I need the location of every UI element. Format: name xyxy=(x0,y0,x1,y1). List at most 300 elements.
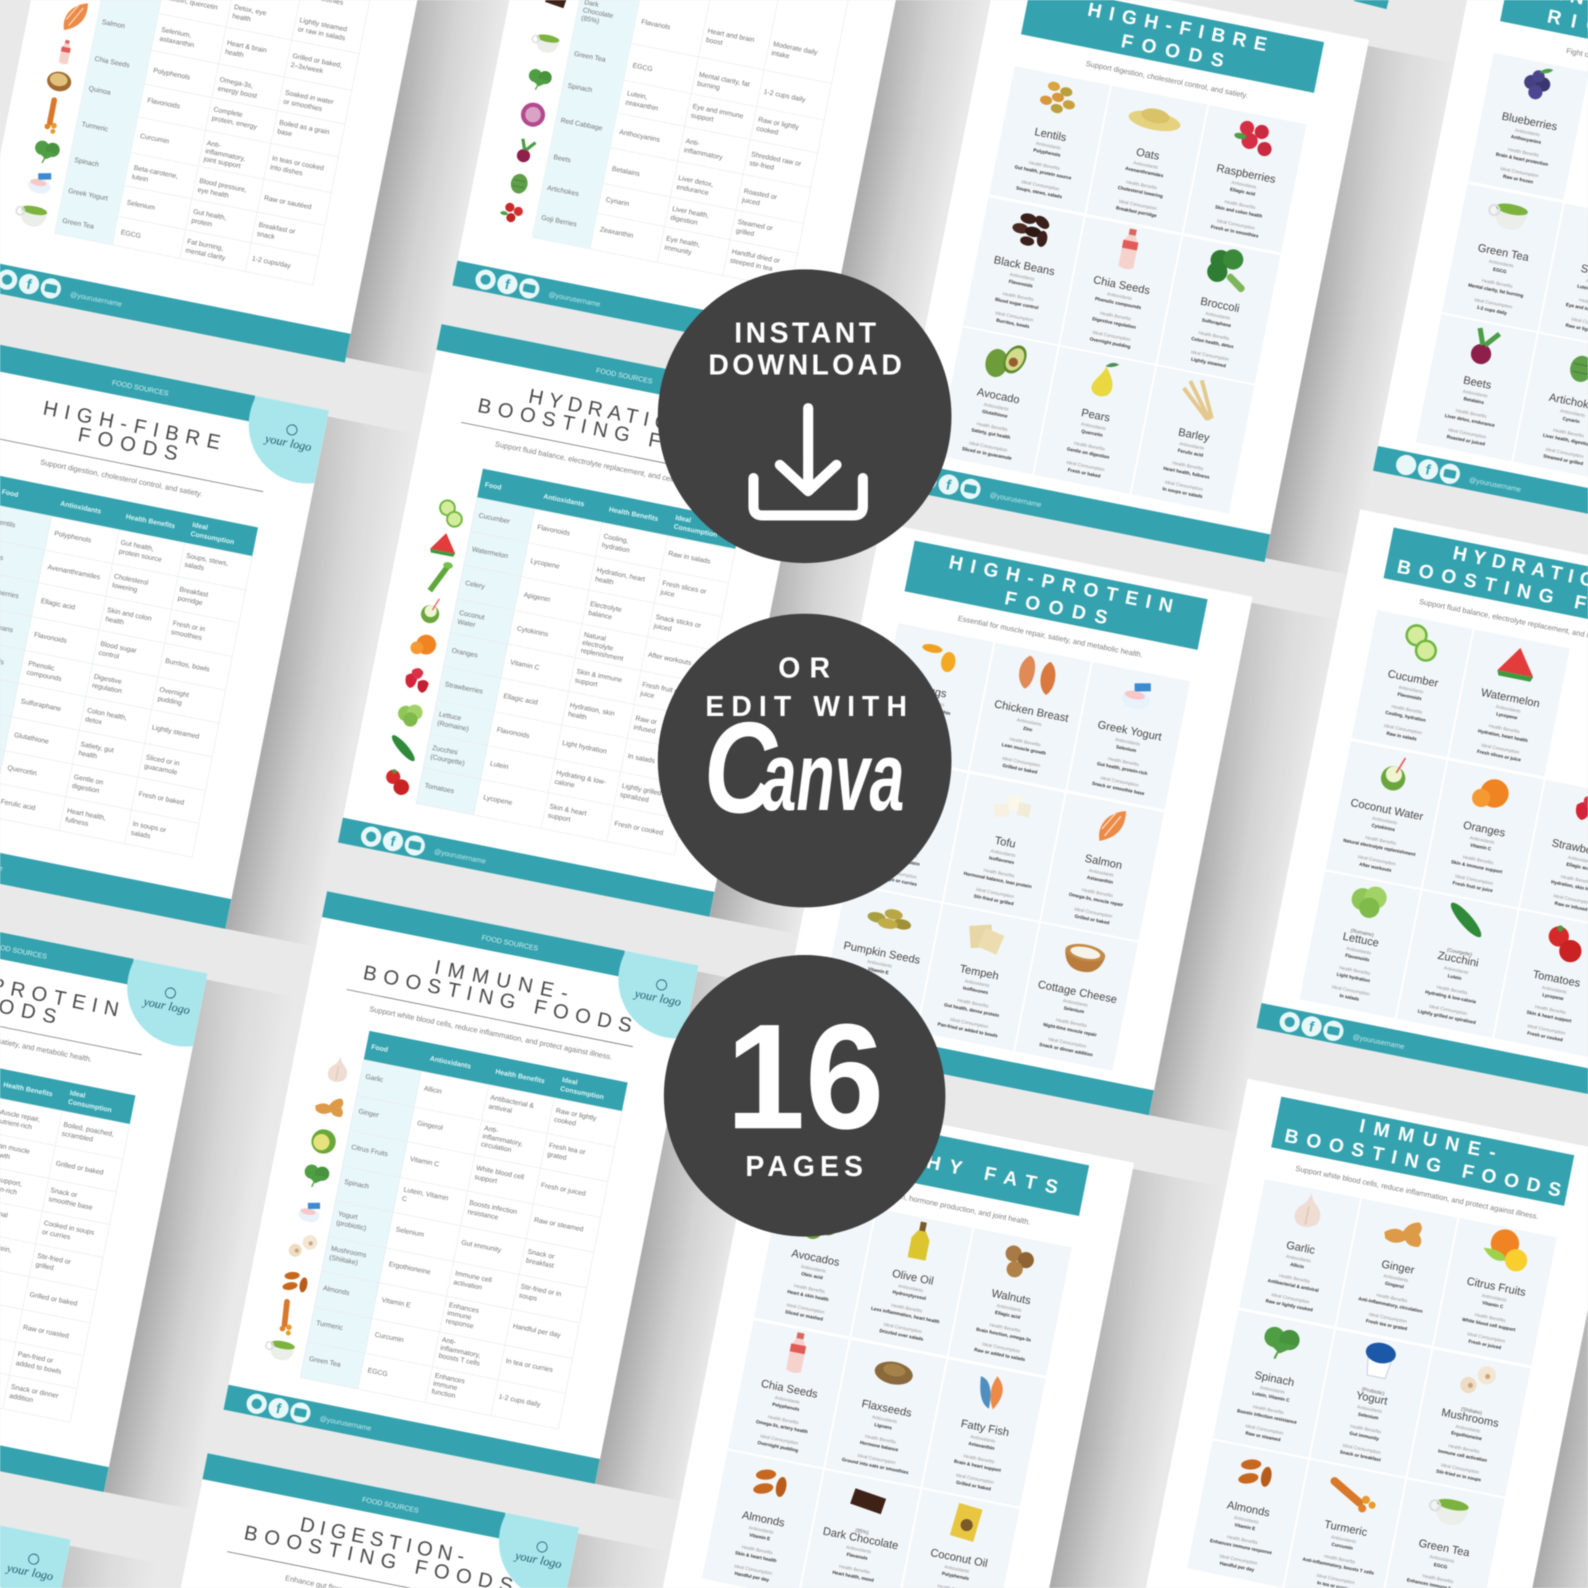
row: celery: balance xyxy=(588,610,613,621)
row: zucchini xyxy=(385,731,671,815)
card: chia seeds xyxy=(728,1320,849,1467)
row: cucumber: Flavonoids xyxy=(537,524,571,538)
badge: instant download: INSTANT xyxy=(734,317,877,349)
row: quinoa: Boiled as a grain xyxy=(278,119,330,136)
badge: or edit with canva: EDIT WITH xyxy=(705,691,907,723)
row: spinach: cooked xyxy=(756,125,779,137)
top band xyxy=(0,899,134,985)
card: green tea: Antioxidants xyxy=(1488,259,1515,269)
card: pears: Antioxidants xyxy=(1081,421,1107,431)
card: green tea: Antioxidants xyxy=(1429,1554,1455,1564)
top band xyxy=(322,891,625,977)
card: tomatoes: Tomatoes xyxy=(1532,969,1582,990)
row: quinoa: protein, energy xyxy=(211,115,258,131)
subtitle: Support digestion, cholesterol control, and satiety. xyxy=(1085,59,1249,100)
title band xyxy=(1271,1097,1574,1206)
row: turmeric: Curcumin xyxy=(139,133,170,146)
card: flaxseeds: Ideal Consumption xyxy=(857,1453,896,1465)
row: coconut water: Natural xyxy=(583,632,606,643)
card: pears: Quercetin xyxy=(1081,429,1103,438)
row: black beans xyxy=(0,616,211,679)
row: turmeric xyxy=(266,1299,556,1391)
row: red cabbage: Anti- xyxy=(685,138,700,148)
title: HIGH-PROTEIN xyxy=(947,552,1175,618)
row: green tea: Green Tea xyxy=(308,1356,341,1369)
card: ginger: Ginger xyxy=(1380,1259,1416,1277)
row: turmeric: In tea or curries xyxy=(505,1358,554,1374)
page: table immune-boosting foods xyxy=(223,890,699,1484)
row: citrus fruits xyxy=(309,1127,588,1206)
row: chia seeds: compounds xyxy=(26,669,63,683)
row: watermelon: Fresh slices or xyxy=(662,580,707,596)
card: ginger: Fresh tea or grated xyxy=(1365,1318,1408,1331)
card: salmon: Grilled or baked xyxy=(1074,914,1110,925)
row: ginger: Anti- xyxy=(483,1125,499,1135)
row: mushrooms: (Shiitake) xyxy=(329,1254,358,1267)
card: green tea: Health Benefits xyxy=(1422,1573,1455,1584)
card: tomatoes: Antioxidants xyxy=(1541,985,1568,995)
rows: eggs to cheese: Stir-fried or xyxy=(37,1253,71,1266)
row: zucchini: calorie xyxy=(554,779,575,789)
logo: your logo xyxy=(512,1548,563,1571)
card: strawberries xyxy=(1520,780,1588,927)
row: mushrooms: activation xyxy=(453,1279,483,1292)
row: almonds: immune xyxy=(447,1310,472,1322)
card: watermelon xyxy=(1449,629,1570,777)
row: garlic: Antibacterial & xyxy=(490,1094,534,1110)
card: ginger: Ideal Consumption xyxy=(1368,1312,1408,1324)
card: barley xyxy=(1132,366,1254,514)
row: lettuce: Lettuce xyxy=(438,711,462,722)
card: coconut water: Coconut Water xyxy=(1349,797,1424,823)
row: green tea xyxy=(529,32,809,109)
card: blueberries xyxy=(1468,53,1588,200)
row: coconut water: After workouts xyxy=(647,652,692,667)
row: kale: Detox, eye xyxy=(233,4,267,17)
card: almonds: Health Benefits xyxy=(1226,1534,1259,1545)
card: flaxseeds: Flaxseeds xyxy=(861,1398,913,1420)
card: avocados: Oleic acid xyxy=(801,1271,823,1280)
rows: eggs to cheese: grilled xyxy=(35,1262,54,1272)
card: yogurt: Ideal Consumption xyxy=(1342,1443,1382,1455)
card: tofu: Health Benefits xyxy=(983,868,1016,879)
card: beets xyxy=(1416,314,1537,461)
row: strawberries xyxy=(403,666,659,739)
card: barley: Ferulic acid xyxy=(1177,448,1204,458)
card: almonds: Almonds xyxy=(1226,1499,1271,1520)
page: table high-fibre foods xyxy=(0,344,330,930)
row: spinach: Beta-carotene, xyxy=(133,165,179,180)
row: dark chocolate xyxy=(543,0,819,69)
band label: FOOD SOURCES xyxy=(111,379,169,398)
row: chia seeds: Polyphenols xyxy=(153,67,191,82)
row: spinach: Eye and immune xyxy=(692,103,744,120)
card: strawberries: Raw or infused xyxy=(1554,901,1588,912)
card: pears: Fresh or baked xyxy=(1067,467,1101,479)
card: pumpkin seeds: Recovery, magnesium xyxy=(850,983,899,998)
title band xyxy=(905,541,1208,650)
row: spinach xyxy=(526,68,800,142)
card: yogurt xyxy=(1310,1330,1431,1477)
row: barley: Heart health, xyxy=(66,808,106,822)
row: green tea: EGCG xyxy=(367,1367,388,1378)
row: yogurt: (probiotic) xyxy=(336,1220,367,1232)
footer xyxy=(778,1016,1154,1115)
row: quinoa: Quinoa xyxy=(88,85,111,97)
table header: Ideal xyxy=(69,1090,86,1100)
row: goji berries xyxy=(499,201,781,276)
rows: eggs to cheese: Cooked in soups xyxy=(43,1220,95,1237)
card: chia seeds xyxy=(1060,217,1181,364)
row: tomatoes: Lycopene xyxy=(483,794,513,807)
row: chia seeds: pudding xyxy=(157,696,182,707)
table header: Ideal xyxy=(561,1077,578,1087)
row: barley xyxy=(0,783,167,843)
card: mushrooms: Health Benefits xyxy=(1448,1443,1481,1454)
row: spinach: Blood pressure, xyxy=(199,178,247,194)
card: tomatoes: Lycopene xyxy=(1542,992,1564,1001)
card: oats: Ideal Consumption xyxy=(1118,199,1158,211)
rows: eggs to cheese: Boiled, poached, xyxy=(63,1122,114,1139)
row: greek yogurt: protein xyxy=(191,218,213,229)
footer xyxy=(1373,446,1588,545)
row: watermelon: juice xyxy=(659,589,675,599)
card: barley: Antioxidants xyxy=(1179,441,1205,451)
row: watermelon: health xyxy=(594,576,614,587)
row: salmon: Grilled or baked, xyxy=(292,53,343,70)
card: lentils: Ideal Consumption xyxy=(1021,179,1060,192)
row: yogurt: breakfast xyxy=(525,1258,554,1270)
card: lentils: Iron, plant protein xyxy=(880,854,920,867)
card: flaxseeds xyxy=(825,1340,946,1487)
row: chia seeds xyxy=(0,649,189,708)
title band xyxy=(1384,527,1588,637)
footer: f xyxy=(25,277,33,293)
row: spinach: zeaxanthin xyxy=(625,99,659,113)
logo xyxy=(126,958,208,1048)
card: mushrooms xyxy=(1408,1349,1531,1497)
rows: eggs to cheese: added to bowls xyxy=(15,1360,62,1376)
card: raspberries: Ideal Consumption xyxy=(1217,218,1256,231)
row: barley: salads xyxy=(130,830,152,841)
row: chia seeds: Phenolic xyxy=(28,660,55,672)
row: chia seeds: Digestive xyxy=(93,674,122,686)
row: barley: fullness xyxy=(65,817,89,828)
card: cucumber: Cucumber xyxy=(1387,668,1440,690)
card: olive oil xyxy=(851,1209,972,1356)
card: citrus fruits: Citrus Fruits xyxy=(1466,1276,1527,1299)
row: ginger: circulation xyxy=(480,1141,512,1154)
card: turmeric xyxy=(1284,1460,1405,1588)
row: mushrooms xyxy=(288,1232,563,1309)
card: oranges: Oranges xyxy=(1462,820,1507,840)
card: green tea: EGCG xyxy=(1493,267,1507,274)
card: dark chocolate xyxy=(799,1470,920,1588)
card: dark chocolate: Heart health, mood xyxy=(832,1570,874,1583)
row: oranges: Fresh fruit or xyxy=(641,681,681,696)
table header: Ideal xyxy=(675,515,692,525)
card: chicken breast: Antioxidants xyxy=(1016,717,1043,727)
row: green tea: Green Tea xyxy=(62,218,94,231)
card: tofu xyxy=(944,774,1065,921)
row: lentils: Soups, stews, xyxy=(186,553,229,568)
card: almonds: Health Benefits xyxy=(741,1544,774,1555)
footer xyxy=(0,260,351,363)
row: tomatoes: Fresh or cooked xyxy=(614,820,664,837)
row: green tea: immune xyxy=(432,1380,458,1392)
logotype: Canva: anva xyxy=(762,722,904,831)
card: barley: Health Benefits xyxy=(1172,460,1204,471)
card: almonds: Handful per day xyxy=(734,1571,770,1583)
row: coconut water xyxy=(419,596,694,676)
row: green tea: Enhances xyxy=(434,1373,465,1385)
footer: @yourusername xyxy=(1352,1033,1405,1051)
badge: 16 pages: 16 xyxy=(726,992,884,1160)
row: green tea: Green Tea xyxy=(573,51,606,64)
row: yogurt: Snack or xyxy=(527,1249,555,1261)
row: oranges: juice xyxy=(639,690,655,700)
row: turmeric: inflammatory, xyxy=(440,1345,481,1360)
rows: eggs to cheese: smoothie base xyxy=(48,1196,93,1212)
row: garlic: Garlic xyxy=(365,1074,384,1084)
card: raspberries: Raspberries xyxy=(1215,163,1277,186)
card: beets: Roasted or juiced xyxy=(1446,434,1486,447)
card: pumpkin seeds xyxy=(820,884,941,1031)
row: artichokes xyxy=(509,172,774,244)
card: watermelon: Lycopene xyxy=(1496,711,1518,721)
card: walnuts: Antioxidants xyxy=(996,1303,1023,1313)
card: olive oil: Antioxidants xyxy=(898,1283,924,1293)
badge: instant download: DOWNLOAD xyxy=(708,350,902,382)
row: tomatoes: Tomatoes xyxy=(424,783,455,795)
badge: or edit with canva: OR xyxy=(778,653,830,685)
card: coconut water: Ideal Consumption xyxy=(1357,854,1397,867)
table grid xyxy=(416,497,735,855)
card: watermelon: Health Benefits xyxy=(1488,723,1521,734)
card: walnuts: Brain function, omega-3s xyxy=(976,1327,1032,1343)
card: spinach: Boosts infection resistance xyxy=(1237,1408,1298,1425)
row: strawberries: health xyxy=(567,711,587,722)
row: turmeric: into dishes xyxy=(270,164,304,178)
row: red cabbage: Shredded raw or xyxy=(751,151,802,168)
row: salmon: Salmon xyxy=(101,19,126,30)
row: red cabbage xyxy=(519,100,803,180)
row: citrus fruits: White blood cell xyxy=(476,1165,525,1181)
card: chicken breast xyxy=(970,643,1091,790)
card: walnuts: Health Benefits xyxy=(989,1322,1022,1333)
band of cropped page at top right xyxy=(1352,0,1390,9)
card: tofu: Ideal Consumption xyxy=(976,887,1015,899)
row: tomatoes xyxy=(383,768,665,847)
footer: @yourusername xyxy=(1469,476,1522,494)
row: garlic: Raw or lightly xyxy=(555,1108,597,1122)
card: avocado: Avocado xyxy=(976,386,1021,407)
card: barley: In soups or salads xyxy=(1162,486,1203,499)
card: mushrooms: Immune cell activation xyxy=(1438,1448,1488,1463)
logo: your logo xyxy=(262,431,313,454)
logotype: Canva xyxy=(704,696,904,840)
card: eggs: Antioxidants xyxy=(919,698,945,708)
card: avocado: Antioxidants xyxy=(983,402,1010,412)
card: coconut oil: Coconut Oil xyxy=(929,1547,989,1570)
card: avocado: Health Benefits xyxy=(976,421,1009,432)
badge: 16 pages: PAGES xyxy=(745,1151,863,1183)
row: goji berries: Goji Berries xyxy=(541,215,578,229)
card: turmeric: Antioxidants xyxy=(1331,1534,1357,1544)
row: oranges: Oranges xyxy=(451,647,479,660)
row: artichokes: Cynarin xyxy=(605,197,630,208)
card: eggs xyxy=(873,623,994,770)
row: green tea xyxy=(14,203,293,278)
row: barley: In soups or xyxy=(132,821,167,834)
card: chicken breast: Grilled or baked xyxy=(1002,763,1038,775)
row: zucchini: Zucchini xyxy=(432,745,458,757)
card: turmeric: Turmeric xyxy=(1323,1519,1369,1539)
row: green tea: 1-2 cups daily xyxy=(498,1394,542,1409)
page: table hydration-boosting foods xyxy=(338,324,813,917)
row: red cabbage: stir-fried xyxy=(749,160,775,172)
row: oats: Breakfast xyxy=(179,586,209,599)
card: almonds: Vitamin E xyxy=(749,1532,771,1541)
card: raspberries: Fresh or in smoothies xyxy=(1210,224,1259,239)
card: lettuce: Antioxidants xyxy=(1346,946,1372,956)
row: green tea: EGCG xyxy=(632,62,653,73)
row: pears xyxy=(0,749,186,812)
row: coconut water: Water xyxy=(457,619,477,629)
row: raspberries xyxy=(0,582,206,642)
card: mushrooms: Stir-fried or in soups xyxy=(1436,1469,1482,1483)
card: garlic: Health Benefits xyxy=(1279,1273,1311,1284)
page: table top centre xyxy=(452,0,927,360)
row: greek yogurt: Gut health, xyxy=(192,209,227,222)
footer: f xyxy=(1424,462,1432,479)
card: turmeric: Anti-inflammatory, boosts T cells xyxy=(1302,1557,1375,1576)
card: chia seeds: Ideal Consumption xyxy=(1092,330,1131,342)
row: mushrooms: soups xyxy=(518,1292,538,1303)
card: eggs: Eggs xyxy=(920,684,948,701)
card: oranges xyxy=(1423,760,1544,908)
footer: @yourusername xyxy=(548,290,601,309)
row: ginger: Gingerol xyxy=(416,1120,444,1132)
table header xyxy=(0,1044,135,1124)
row: spinach: resistance xyxy=(467,1209,499,1222)
card: blueberries: Anthocyanins xyxy=(1510,134,1542,145)
rows: eggs to cheese: Snack or xyxy=(50,1187,78,1199)
row: oranges: Vitamin C xyxy=(510,659,540,672)
card: olive oil: Health Benefits xyxy=(891,1303,923,1314)
card: tempeh: Isoflavones xyxy=(963,985,989,995)
row: spinach: Spinach xyxy=(567,83,593,94)
card: pumpkin seeds: Health Benefits xyxy=(860,978,892,989)
card: almonds: Skin & heart health xyxy=(735,1550,777,1563)
table grid xyxy=(0,505,252,857)
footer xyxy=(224,1385,600,1484)
row: strawberries: infused xyxy=(633,724,656,735)
row: spinach: lutein xyxy=(131,174,149,184)
card: tempeh: Ideal Consumption xyxy=(950,1017,989,1029)
row: green tea: function xyxy=(431,1388,456,1400)
footer xyxy=(0,825,231,929)
card: coconut water: After workouts xyxy=(1359,862,1392,873)
footer xyxy=(452,261,829,360)
card: artichokes: Steamed or grilled xyxy=(1543,453,1584,466)
title band xyxy=(786,1107,1089,1216)
row: quinoa: base xyxy=(277,128,293,138)
card: coconut water: Cytokinins xyxy=(1371,823,1396,832)
row: green tea: Fat burning, xyxy=(187,238,224,252)
row: chia seeds: or smoothies xyxy=(283,99,323,113)
logo: your logo xyxy=(632,986,682,1009)
row: artichokes: Artichokes xyxy=(547,185,580,198)
card: cottage cheese: Ideal Consumption xyxy=(1048,1036,1087,1049)
row: citrus fruits: Fresh or juiced xyxy=(540,1182,586,1198)
card: zucchini: Antioxidants xyxy=(1443,965,1470,975)
row: chia seeds: energy boost xyxy=(217,85,258,100)
row: celery xyxy=(430,560,704,644)
row: broccoli: Lightly steamed xyxy=(151,724,200,741)
logo xyxy=(498,1512,580,1588)
row: green tea: 1-2 cups/day xyxy=(251,255,292,270)
card: citrus fruits xyxy=(1434,1218,1557,1366)
row: garlic: Allicin xyxy=(423,1085,442,1096)
table grid xyxy=(300,1060,622,1429)
card: pears xyxy=(1034,347,1155,494)
row: salmon xyxy=(62,0,344,85)
row: zucchini: (Courgette) xyxy=(430,754,465,767)
card: citrus fruits: Vitamin C xyxy=(1482,1300,1504,1309)
row: spinach: Spinach xyxy=(344,1179,370,1191)
card: olive oil: Drizzled over salads xyxy=(879,1328,924,1342)
row: artichokes: Liver health, xyxy=(671,206,710,220)
card: tomatoes: Ideal Consumption xyxy=(1527,1023,1566,1036)
card: lettuce: Ideal Consumption xyxy=(1331,984,1371,997)
card: almonds: Ideal Consumption xyxy=(1219,1553,1258,1566)
row: lentils: salads xyxy=(184,561,205,572)
row: oats xyxy=(0,548,209,608)
card: lettuce: Flavonoids xyxy=(1345,953,1370,963)
card: yogurt: Antioxidants xyxy=(1357,1404,1383,1414)
card: artichokes: Cynarin xyxy=(1562,416,1580,424)
row: avocado: Sliced or in xyxy=(145,754,180,768)
row: almonds: Almonds xyxy=(322,1285,351,1297)
card: green tea: 1-2 cups daily xyxy=(1476,305,1508,316)
card: broccoli: Antioxidants xyxy=(1205,311,1231,321)
subtitle: Essential for muscle repair, satiety, and metabolic health. xyxy=(957,614,1144,659)
table header xyxy=(364,1031,628,1111)
row: spinach: Lutein, xyxy=(626,90,648,101)
card: black beans xyxy=(963,197,1084,344)
row: dark chocolate: Heart and brain xyxy=(707,28,755,44)
card: walnuts: Raw or added to salads xyxy=(974,1347,1026,1362)
card: watermelon: Watermelon xyxy=(1480,687,1541,710)
card: mushrooms: Ideal Consumption xyxy=(1441,1462,1480,1475)
row: kale: Lightly steamed xyxy=(299,17,347,33)
row: celery: Electrolyte xyxy=(589,601,622,614)
card: avocados: Heart & skin health xyxy=(787,1289,829,1302)
footer: @yourusername xyxy=(989,491,1042,509)
card: olive oil: Olive Oil xyxy=(891,1268,935,1288)
card: salmon: Salmon xyxy=(1084,853,1123,872)
card: black beans: Black Beans xyxy=(993,254,1056,278)
card: cucumber: Antioxidants xyxy=(1398,685,1424,695)
title: HYDRATION- xyxy=(527,386,705,442)
row: chia seeds xyxy=(58,39,336,118)
card: coconut oil xyxy=(897,1489,1019,1588)
row: barley: Ferulic acid xyxy=(0,798,36,812)
card: oranges: Antioxidants xyxy=(1469,835,1496,845)
row: pears: Quercetin xyxy=(7,765,38,777)
card: fatty fish: Ideal Consumption xyxy=(955,1472,995,1485)
